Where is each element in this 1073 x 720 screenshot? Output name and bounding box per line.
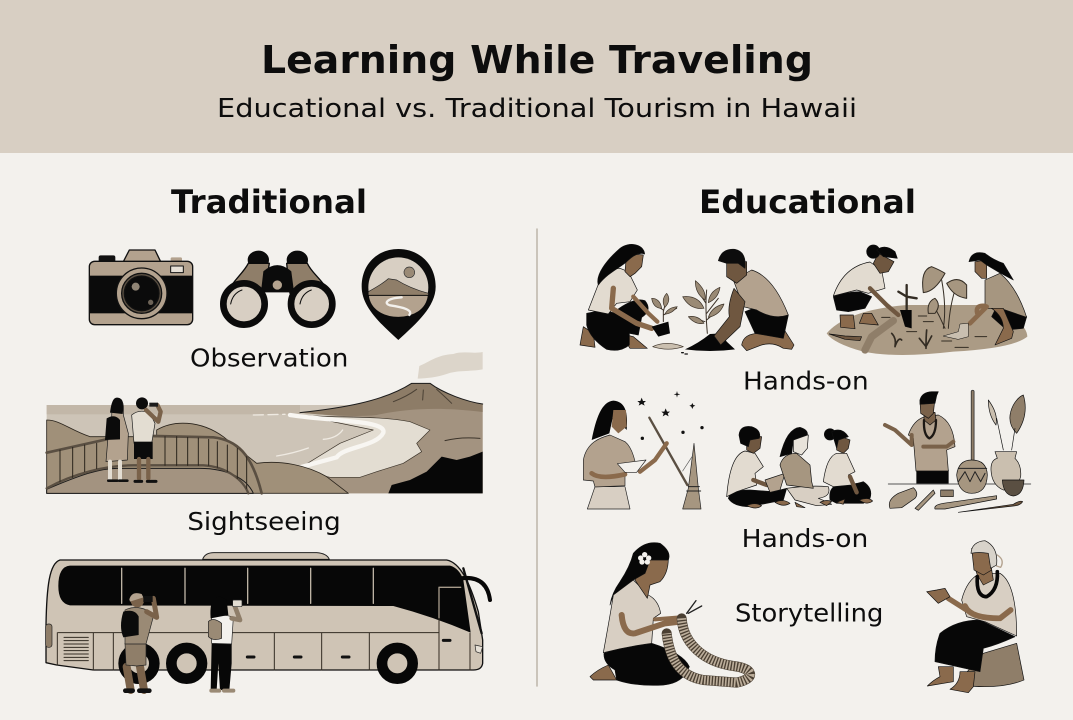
left hills <box>47 420 348 493</box>
taro garden group <box>827 267 1027 355</box>
tourists <box>105 397 161 481</box>
tourist with backpack <box>208 597 242 691</box>
instructor with artefacts <box>885 392 1031 512</box>
flower <box>638 552 651 565</box>
label: storytelling: Storytelling <box>735 599 883 628</box>
three seated students <box>727 426 873 508</box>
wheels <box>124 648 413 679</box>
title: Learning While Traveling <box>261 38 813 82</box>
lei <box>667 601 750 683</box>
heading: traditional: Traditional <box>171 183 367 221</box>
elder storyteller <box>927 541 1024 693</box>
header band <box>0 0 1073 153</box>
label: hands-on (first): Hands-on <box>743 366 869 395</box>
seedling and soil <box>652 281 735 354</box>
smoke <box>418 352 483 379</box>
viewing deck <box>47 468 253 493</box>
label: observation: Observation <box>190 344 348 373</box>
label: sightseeing: Sightseeing <box>187 507 341 536</box>
surf <box>290 415 383 467</box>
landscape scene <box>47 352 483 493</box>
heading: educational: Educational <box>699 183 916 221</box>
panel: traditional bottom (sightseeing and bus) <box>46 507 490 691</box>
panel: traditional top (icons and landscape) <box>47 249 483 493</box>
volcano and far land <box>300 383 483 493</box>
black bush <box>388 452 483 493</box>
crouching woman right <box>943 253 1027 345</box>
woman making lei <box>590 543 689 685</box>
navigator with star compass <box>583 391 704 509</box>
icon: camera <box>89 250 193 325</box>
panel: educational row 2 (learning) <box>583 391 1031 553</box>
man planting <box>714 249 794 351</box>
icon: binoculars <box>223 251 332 325</box>
beach <box>297 415 430 477</box>
crouching woman left <box>833 245 898 329</box>
subtitle: Educational vs. Traditional Tourism in Hawaii <box>217 94 857 124</box>
stars <box>637 391 704 440</box>
woman planting <box>580 244 657 350</box>
panel: educational row 3 (lei making and storytelling) <box>590 541 1024 693</box>
panel: educational row 1 (planting) <box>580 244 1027 395</box>
icon: map pin <box>362 249 436 340</box>
railing <box>47 436 262 493</box>
tourist with cap <box>121 593 157 691</box>
bus <box>46 553 490 679</box>
label: hands-on (second): Hands-on <box>742 524 868 553</box>
